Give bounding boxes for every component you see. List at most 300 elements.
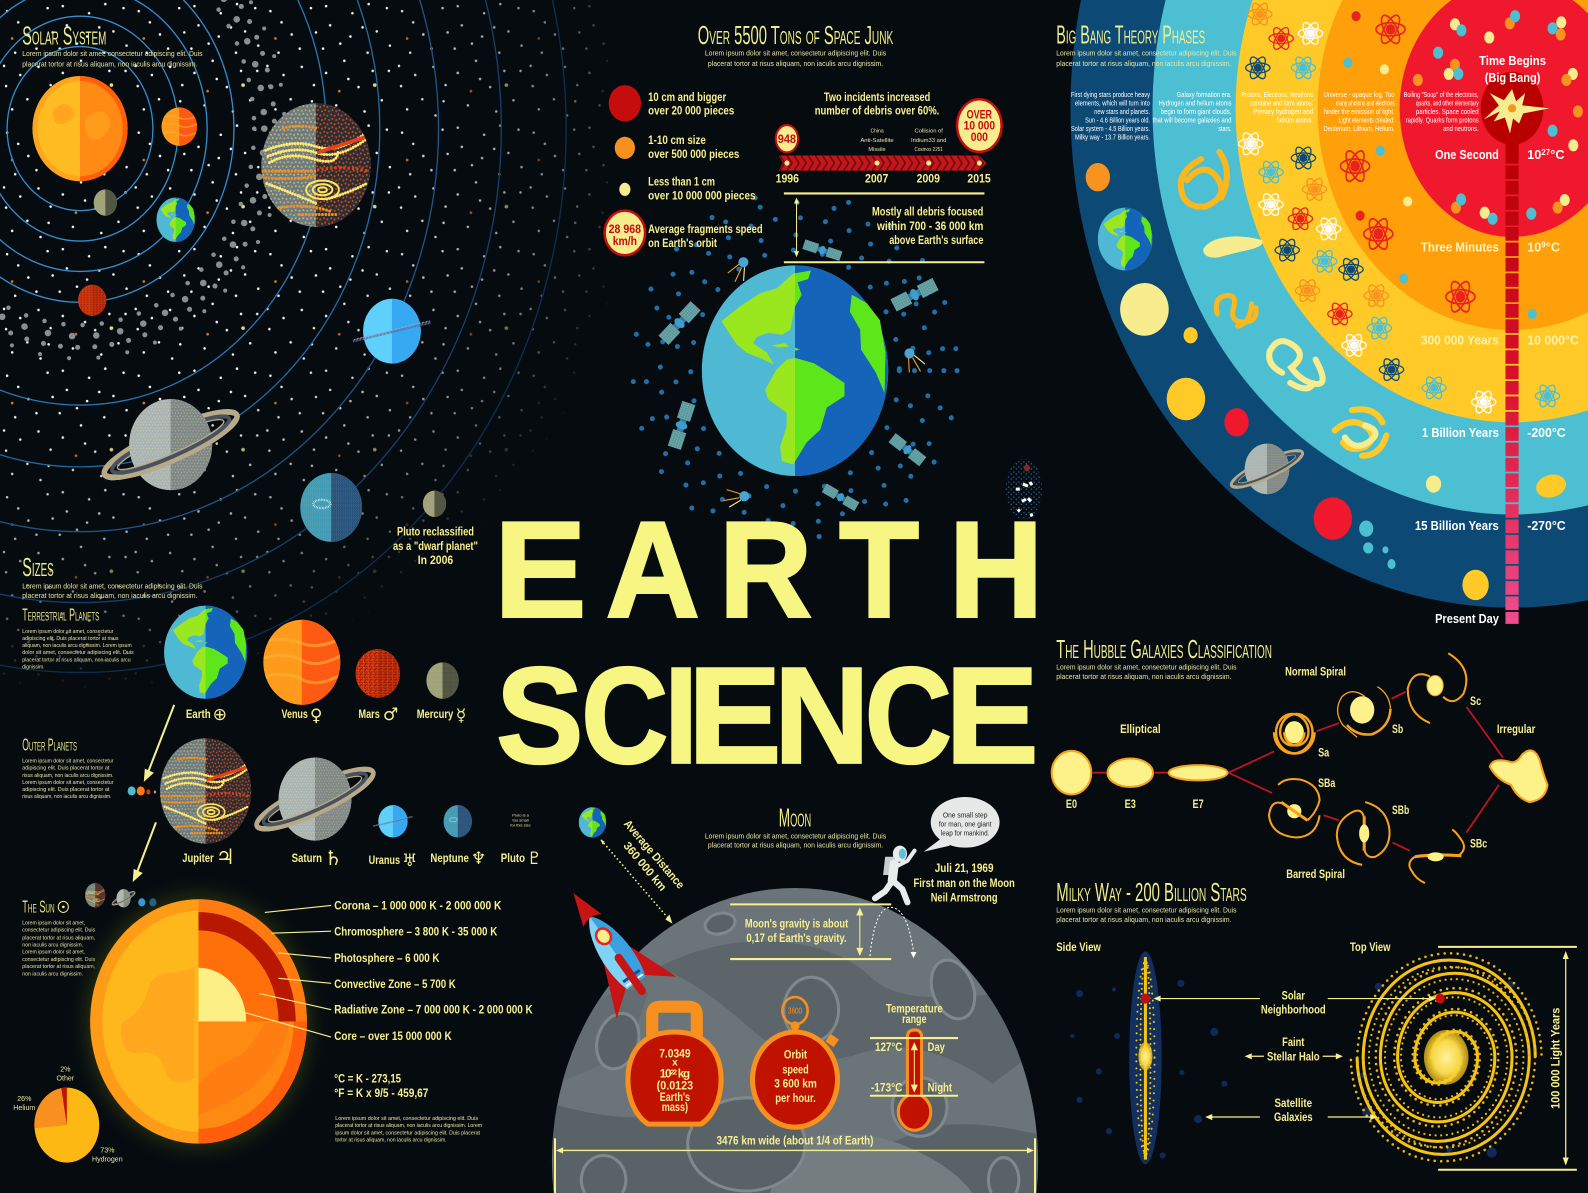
milky way labels and arrows: Faint bbox=[1282, 1036, 1305, 1049]
pie chart: sun composition: Other bbox=[56, 1075, 75, 1083]
phase descriptions: combine and form atoms. bbox=[1250, 100, 1313, 107]
phase descriptions: hinder the emission of light. bbox=[1324, 109, 1395, 116]
planet: mercury bbox=[94, 189, 117, 216]
hubble labels: Barred Spiral bbox=[1286, 868, 1345, 881]
milky way labels and arrows: Satellite bbox=[1275, 1097, 1312, 1110]
concentric phase rings bbox=[1070, 0, 1588, 608]
phase labels: 27 bbox=[1541, 148, 1551, 157]
legend: debris sizes: Less than 1 cm bbox=[648, 175, 715, 188]
barred galaxy: SBc bbox=[1409, 829, 1464, 883]
hubble labels: Sa bbox=[1318, 747, 1330, 760]
phase descriptions: Hydrogen and helium atoms bbox=[1159, 100, 1232, 107]
sizes text: Lorem ipsum dolor sit amet, consectetur adipiscing elit. Duis bbox=[22, 581, 203, 590]
phase descriptions: elements, which will turn into bbox=[1075, 100, 1150, 107]
debris altitude callout: Mostly all debris focused bbox=[872, 206, 983, 219]
thermometer: temperature range: Day bbox=[928, 1041, 945, 1054]
moon text: placerat tortor at risus aliquam, non iaculis arcu dignissim. bbox=[708, 841, 883, 850]
outer labels bbox=[182, 845, 542, 871]
terrestrial text: Lorem ipsum dolor sit amet, consectetur bbox=[22, 629, 114, 635]
planet: earth bbox=[164, 606, 247, 699]
outer text: adipiscing elit. Duis placerat tortor at bbox=[22, 787, 110, 793]
timeline: Cosmos 2251 bbox=[915, 147, 943, 153]
first man note bbox=[914, 862, 1015, 904]
pluto microtext: for this size bbox=[510, 822, 532, 827]
debris altitude callout: above Earth's surface bbox=[889, 234, 984, 247]
timeline: 948 bbox=[778, 133, 797, 146]
phase labels: 10 bbox=[1527, 241, 1541, 255]
planet: neptune bbox=[300, 473, 362, 542]
phase descriptions: helium atoms. bbox=[1277, 118, 1313, 125]
title: earth science: E bbox=[688, 639, 781, 792]
pie chart: sun composition: 73% bbox=[100, 1146, 115, 1154]
satellite bbox=[888, 433, 926, 466]
phase labels: 9 bbox=[1541, 241, 1546, 250]
heading: space junk: Over 5500 Tons of Space Junk bbox=[698, 20, 893, 50]
sun text: consectetur adipiscing elit. Duis bbox=[22, 928, 95, 934]
planet: earth bbox=[156, 197, 195, 242]
pie chart: sun composition: 2% bbox=[60, 1065, 71, 1073]
orbit rings bbox=[0, 0, 566, 672]
title: earth science: R bbox=[719, 493, 812, 646]
phase descriptions: Boiling "Soup" of the electrons, bbox=[1404, 92, 1479, 99]
hubble labels bbox=[1066, 665, 1536, 881]
connector lines bbox=[1093, 692, 1503, 851]
planet: jupiter bbox=[160, 738, 251, 844]
sun fine print bbox=[335, 1116, 482, 1143]
solar system text bbox=[22, 49, 203, 68]
milky way text: Lorem ipsum dolor sit amet, consectetur adipiscing elit. Duis bbox=[1056, 905, 1237, 914]
terrestrial labels: Earth bbox=[186, 708, 211, 721]
planet: venus bbox=[162, 107, 197, 146]
timeline: 2009 bbox=[917, 172, 940, 185]
timeline: 2007 bbox=[865, 172, 888, 185]
big bang text bbox=[1056, 49, 1237, 68]
phase labels: 10 bbox=[1527, 148, 1541, 162]
temperature formulas: °C = K - 273,15 bbox=[334, 1073, 401, 1086]
sun layer labels: Core – over 15 000 000 K bbox=[334, 1030, 452, 1043]
stopwatch: orbit speed: 3 600 km bbox=[774, 1078, 817, 1091]
asteroid belt bbox=[0, 0, 285, 359]
satellite bbox=[890, 278, 939, 312]
phase descriptions: Sun - 4.6 Billion years old. bbox=[1085, 118, 1150, 125]
phase descriptions: Deuterium, Lithium, Helium. bbox=[1324, 126, 1395, 133]
timeline: 10 000 bbox=[964, 120, 995, 133]
terrestrial text: placerat tortor at risus aliquam, non iaculis arcu bbox=[22, 657, 131, 663]
atoms bbox=[1239, 1, 1560, 415]
terrestrial labels: ♂ bbox=[383, 705, 398, 725]
icon: sun symbol bbox=[58, 901, 68, 912]
moon width dimension: 3476 km wide (about 1/4 of Earth) bbox=[717, 1134, 874, 1147]
debris altitude callout: within 700 - 36 000 km bbox=[876, 220, 983, 233]
spiral galaxy: Sb bbox=[1338, 687, 1391, 737]
elliptical galaxies bbox=[1052, 751, 1227, 794]
average distance label: 360 000 km bbox=[621, 840, 669, 894]
phase labels: 300 000 Years bbox=[1421, 333, 1499, 347]
milky way labels and arrows: Stellar Halo bbox=[1267, 1050, 1320, 1063]
outer labels: ♄ bbox=[324, 846, 342, 870]
terrestrial labels bbox=[186, 705, 466, 726]
mini inner planets bbox=[128, 786, 156, 796]
timeline: Missile bbox=[868, 147, 886, 153]
sun text: Lorem ipsum dolor sit amet, bbox=[22, 921, 85, 927]
moon text: Lorem ipsum dolor sit amet, consectetur adipiscing elit. Duis bbox=[705, 832, 886, 841]
planet: saturn bbox=[99, 399, 242, 490]
debris altitude callout bbox=[784, 193, 984, 262]
heading: moon: Moon bbox=[779, 802, 811, 832]
sun text: non iaculis arcu dignissim. bbox=[22, 971, 83, 977]
side view galaxy: Side View bbox=[1056, 941, 1102, 954]
planet: saturn bbox=[252, 758, 378, 841]
hubble labels: E0 bbox=[1066, 798, 1077, 811]
hubble labels: SBc bbox=[1470, 838, 1488, 851]
milky way labels and arrows: Galaxies bbox=[1274, 1111, 1313, 1124]
sun fine print: ipsum dolor sit amet, consectetur adipiscing elit. Duis placerat bbox=[335, 1130, 480, 1136]
speed badge: km/h bbox=[613, 235, 637, 248]
speed badge: on Earth's orbit bbox=[648, 237, 717, 250]
sun cross-section bbox=[90, 899, 307, 1144]
phase descriptions: particles. Space cooled bbox=[1416, 109, 1479, 116]
thermometer: temperature range: -173°C bbox=[871, 1082, 903, 1095]
stopwatch: orbit speed: per hour. bbox=[775, 1092, 816, 1105]
title: earth science: E bbox=[494, 493, 586, 646]
panel: milky way bbox=[1056, 877, 1577, 1170]
galaxy diameter dimension bbox=[1438, 947, 1577, 1170]
planet: venus bbox=[263, 620, 340, 705]
galaxies in cyan ring bbox=[1181, 152, 1569, 501]
sizes text: placerat tortor at risus aliquam, non iaculis arcu dignissim. bbox=[22, 591, 197, 600]
astronaut dissolved in space bbox=[1006, 459, 1042, 520]
terrestrial labels: ⊕ bbox=[213, 705, 227, 725]
thermometer: temperature range: Night bbox=[928, 1082, 952, 1095]
outer labels: Saturn bbox=[292, 852, 322, 865]
planet: neptune bbox=[444, 805, 472, 838]
space junk text: Lorem ipsum dolor sit amet, consectetur adipiscing elit. Duis bbox=[705, 49, 886, 58]
phase labels: 15 Billion Years bbox=[1415, 519, 1499, 533]
terrestrial labels: Venus bbox=[282, 708, 308, 721]
planet: mercury bbox=[426, 662, 459, 699]
phase descriptions: quarks, and other elementary bbox=[1416, 100, 1479, 107]
sun layer labels: Photosphere – 6 000 K bbox=[334, 952, 440, 965]
hubble labels: Elliptical bbox=[1120, 723, 1161, 736]
timeline: 1996 bbox=[776, 172, 799, 185]
small earth bbox=[579, 807, 606, 838]
barred galaxy: SBa bbox=[1269, 779, 1320, 838]
probe bbox=[726, 255, 756, 286]
satellite bbox=[802, 239, 842, 261]
sun text: Lorem ipsum dolor sit amet, bbox=[22, 949, 85, 955]
outer text: Lorem ipsum dolor sit amet, consectetur bbox=[22, 759, 114, 765]
heading: big bang: Big Bang Theory Phases bbox=[1056, 20, 1205, 50]
kettlebell: mass: kg bbox=[676, 1068, 690, 1081]
panel: moon bbox=[543, 797, 1038, 1193]
timeline: 000 bbox=[971, 131, 988, 144]
gravity callout: Moon's gravity is about bbox=[745, 918, 848, 931]
pluto note: Pluto reclassified bbox=[397, 526, 474, 539]
title: earth science: A bbox=[606, 493, 700, 646]
subheading: terrestrial planets: Terrestrial Planets bbox=[22, 604, 99, 624]
pluto microtext bbox=[510, 812, 532, 827]
legend: debris sizes: 10 cm and bigger bbox=[648, 91, 727, 104]
sun fine print: Lorem ipsum dolor sit amet, consectetur adipiscing elit. Duis bbox=[335, 1116, 478, 1122]
title: earth science bbox=[494, 493, 1043, 792]
outer text: risus aliquam, non iaculis arcu dignissim. bbox=[22, 794, 112, 800]
legend: debris sizes: 1-10 cm size bbox=[648, 134, 706, 147]
phase labels: Three Minutes bbox=[1421, 241, 1499, 255]
thermometer: temperature range: 127°C bbox=[875, 1041, 903, 1054]
phase descriptions: begin to form giant clouds, bbox=[1161, 109, 1232, 116]
speech bubble: leap for mankind. bbox=[941, 829, 989, 838]
outer labels: Pluto bbox=[501, 852, 525, 865]
timeline bbox=[776, 91, 1002, 185]
pluto note: as a "dwarf planet" bbox=[393, 540, 478, 553]
phase labels: Present Day bbox=[1435, 612, 1499, 626]
irregular galaxy bbox=[1490, 750, 1547, 802]
heading: milky way: Milky Way - 200 Billion Stars bbox=[1056, 877, 1247, 907]
legend: debris sizes: over 500 000 pieces bbox=[648, 148, 739, 161]
hubble labels: Irregular bbox=[1497, 723, 1536, 736]
probe bbox=[723, 489, 750, 509]
probe bbox=[903, 345, 926, 374]
space junk text bbox=[705, 49, 886, 68]
title: earth science: E bbox=[945, 639, 1039, 792]
milky way labels and arrows bbox=[1154, 990, 1436, 1124]
phase descriptions: Solar system - 4.5 Billion years. bbox=[1071, 126, 1150, 133]
thermometer: temperature range bbox=[870, 1003, 958, 1130]
space junk text: placerat tortor at risus aliquam, non iaculis arcu dignissim. bbox=[708, 59, 883, 68]
pluto note: In 2006 bbox=[418, 554, 454, 567]
terrestrial text: aliquam, non iaculis arcu dignissim. Lorem ipsum bbox=[22, 643, 132, 649]
terrestrial labels: Mercury bbox=[417, 708, 454, 721]
thermometer: temperature range: Temperature bbox=[886, 1003, 943, 1016]
barred galaxy: SBb bbox=[1337, 802, 1390, 865]
stopwatch: orbit speed: Orbit bbox=[784, 1048, 807, 1061]
speech bubble: for man, one giant bbox=[939, 819, 992, 828]
arrow: scale down to outer planets bbox=[144, 705, 174, 782]
speed badge: Average fragments speed bbox=[648, 223, 763, 236]
phase labels: 10 000°C bbox=[1527, 333, 1579, 347]
pie chart: sun composition: Hydrogen bbox=[92, 1156, 123, 1164]
outer text: adipiscing elit. Duis placerat tortor at bbox=[22, 766, 110, 772]
first man note: Juli 21, 1969 bbox=[935, 862, 994, 875]
timeline: 2015 bbox=[967, 172, 991, 185]
terrestrial text: dignissim. bbox=[22, 664, 45, 670]
star field bbox=[0, 0, 608, 709]
planet: mars bbox=[355, 649, 400, 698]
hubble labels: SBb bbox=[1392, 804, 1409, 817]
outer labels: ♅ bbox=[402, 851, 418, 871]
top view galaxy bbox=[1350, 941, 1542, 1161]
timeline: China bbox=[870, 129, 884, 135]
satellite bbox=[658, 301, 701, 345]
outer labels: Uranus bbox=[369, 854, 400, 867]
kettlebell: mass: x bbox=[672, 1057, 678, 1068]
title: earth science: I bbox=[664, 639, 698, 792]
big bang text: placerat tortor at risus aliquam, non iaculis arcu dignissim. bbox=[1056, 59, 1232, 68]
sun layer labels: Convective Zone – 5 700 K bbox=[334, 978, 456, 991]
temperature formulas bbox=[334, 1073, 428, 1100]
planet: uranus bbox=[353, 299, 431, 364]
sun text: placerat tortor at risus aliquam, bbox=[22, 964, 96, 970]
speech bubble bbox=[924, 797, 1000, 852]
terrestrial text: adipiscing elit. Duis placerat tortor at risus bbox=[22, 636, 119, 642]
debris dots bbox=[633, 192, 957, 549]
panel: the sun bbox=[13, 874, 533, 1169]
phase descriptions: many photons and electrons bbox=[1336, 100, 1395, 107]
gravity callout bbox=[730, 904, 917, 959]
spiral galaxy: Sa bbox=[1274, 714, 1315, 753]
heading: hubble: The Hubble Galaxies Classification bbox=[1056, 634, 1272, 664]
phase labels: °C bbox=[1546, 241, 1560, 255]
terrestrial text bbox=[22, 629, 134, 670]
first man note: Neil Armstrong bbox=[931, 891, 998, 904]
panel: space junk bbox=[605, 20, 1042, 549]
outer labels: ♇ bbox=[527, 849, 542, 869]
hubble labels: E3 bbox=[1125, 798, 1136, 811]
phase descriptions bbox=[1071, 92, 1479, 142]
pie chart: sun composition: Helium bbox=[13, 1104, 35, 1112]
phase labels: °C bbox=[1550, 148, 1565, 162]
kettlebell: mass: mass) bbox=[662, 1101, 688, 1114]
milky way labels and arrows: Neighborhood bbox=[1261, 1004, 1326, 1017]
arrow: earth-moon distance bbox=[601, 840, 672, 924]
title: earth science: H bbox=[949, 493, 1043, 646]
title: earth science: T bbox=[839, 493, 919, 646]
timeline: Collision of bbox=[915, 129, 943, 135]
temperature formulas: °F = K x 9/5 - 459,67 bbox=[334, 1087, 428, 1100]
panel: solar system bbox=[0, 0, 608, 709]
phase descriptions: and neutrons. bbox=[1443, 126, 1479, 133]
big bang explosion bbox=[1481, 72, 1550, 157]
timeline: Two incidents increased bbox=[824, 91, 930, 104]
galaxy diameter dimension: 100 000 Light Years bbox=[1550, 1008, 1563, 1109]
outer text bbox=[22, 759, 114, 800]
phase labels: Time Begins bbox=[1479, 54, 1546, 68]
first man note: First man on the Moon bbox=[914, 877, 1015, 890]
title: earth science: C bbox=[865, 639, 952, 792]
sun glow bbox=[67, 874, 330, 1169]
hubble text bbox=[1056, 662, 1237, 681]
outer labels: Jupiter bbox=[182, 852, 214, 865]
panel: hubble classification bbox=[1052, 634, 1547, 883]
speed badge bbox=[605, 211, 763, 255]
kettlebell: mass: 7.0349 bbox=[659, 1047, 691, 1060]
big bang text: Lorem ipsum dolor sit amet, consectetur adipiscing elit. Duis bbox=[1056, 49, 1237, 58]
phase labels: -270°C bbox=[1527, 519, 1566, 533]
stopwatch: orbit speed: speed bbox=[782, 1063, 809, 1076]
phase labels: -200°C bbox=[1527, 426, 1566, 440]
kettlebell: mass: (0.0123 bbox=[657, 1080, 694, 1093]
solar system text: Lorem ipsum dolor sit amet, consectetur adipiscing elit. Duis bbox=[22, 49, 203, 58]
sun layer labels bbox=[334, 899, 533, 1043]
pluto note bbox=[393, 526, 478, 567]
hubble labels: E7 bbox=[1193, 798, 1204, 811]
title: earth science: C bbox=[581, 639, 668, 792]
sun fine print: placerat tortor at risus aliquam, non iaculis arcu dignissim. Lorem bbox=[335, 1123, 482, 1129]
sun fine print: tortor at risus aliquam, non iaculis arcu dignissim. bbox=[335, 1137, 447, 1143]
title: earth science: S bbox=[496, 639, 583, 792]
pluto microtext: Pluto is a bbox=[512, 812, 530, 817]
phase descriptions: that will become galaxies and bbox=[1153, 118, 1232, 125]
timeline: Anti-Satellite bbox=[860, 138, 894, 144]
phase descriptions: Protons, Electrons, Neutrons bbox=[1241, 92, 1313, 99]
outer labels: ♃ bbox=[216, 845, 235, 870]
heading: sizes: Sizes bbox=[22, 552, 54, 582]
kettlebell: mass: 22 bbox=[670, 1069, 677, 1077]
hubble labels: Normal Spiral bbox=[1285, 665, 1346, 678]
average distance label: Average Distance bbox=[621, 818, 687, 892]
timeline: Iridium33 and bbox=[911, 138, 946, 144]
terrestrial text: dolor sit amet, consectetur adipiscing elit. Duis bbox=[22, 650, 134, 656]
phase labels: (Big Bang) bbox=[1485, 71, 1540, 85]
phase descriptions: rapidly. Quarks form protons bbox=[1406, 118, 1479, 125]
planets in navy ring bbox=[1086, 163, 1489, 600]
outer text: risus aliquam, non iaculis arcu dignissim. bbox=[22, 773, 114, 779]
legend: debris sizes: over 10 000 000 pieces bbox=[648, 190, 756, 203]
phase descriptions: Light elements created: bbox=[1339, 118, 1395, 125]
kettlebell: mass bbox=[628, 1007, 721, 1124]
planet: uranus bbox=[373, 805, 413, 838]
hubble text: Lorem ipsum dolor sit amet, consectetur adipiscing elit. Duis bbox=[1056, 662, 1237, 671]
terrestrial labels: Mars bbox=[359, 708, 380, 721]
phase labels: One Second bbox=[1435, 148, 1499, 162]
phase descriptions: First dying stars produce heavy bbox=[1071, 92, 1150, 99]
milky way labels and arrows: Solar bbox=[1282, 990, 1305, 1003]
outer labels: ♆ bbox=[471, 849, 486, 869]
sun layer labels: Chromosphere – 3 800 K - 35 000 K bbox=[334, 925, 498, 938]
sun text: placerat tortor at risus aliquam, bbox=[22, 935, 96, 941]
legend: debris sizes bbox=[609, 85, 756, 203]
moon width dimension bbox=[555, 1134, 1035, 1193]
planet: jupiter bbox=[261, 103, 371, 227]
top view galaxy: Top View bbox=[1350, 941, 1391, 954]
stopwatch: orbit speed: 3600 bbox=[788, 1007, 802, 1016]
timeline: number of debris over 60%. bbox=[815, 104, 939, 117]
mini outer planets bbox=[85, 883, 156, 907]
sun layer leader lines bbox=[246, 905, 331, 1037]
moon globe bbox=[552, 888, 1038, 1193]
terrestrial labels: ☿ bbox=[456, 706, 466, 726]
rocket bbox=[543, 872, 676, 1019]
hubble labels: SBa bbox=[1318, 777, 1336, 790]
speed badge: 28 968 bbox=[609, 223, 642, 236]
pluto microtext: too small bbox=[512, 817, 529, 822]
timeline ladder bbox=[1506, 135, 1519, 624]
phase descriptions: stars. bbox=[1218, 126, 1232, 133]
phase descriptions: Primary hydrogen and bbox=[1253, 109, 1313, 116]
outer labels: Neptune bbox=[430, 852, 469, 865]
moon text bbox=[705, 832, 886, 850]
subheading: outer planets: Outer Planets bbox=[22, 734, 77, 754]
phase descriptions: Universe - opaque fog. Too bbox=[1324, 92, 1395, 99]
planet: mars bbox=[78, 285, 106, 316]
planet: sun bbox=[32, 76, 128, 181]
outer text: Lorem ipsum dolor sit amet, consectetur bbox=[22, 780, 114, 786]
sun layer labels: Corona – 1 000 000 K - 2 000 000 K bbox=[334, 899, 502, 912]
panel: sizes bbox=[22, 552, 542, 907]
astronaut bbox=[875, 846, 915, 902]
speech bubble: One small step bbox=[943, 810, 987, 819]
heading: solar system: Solar System bbox=[22, 21, 106, 51]
phase descriptions: new stars and planets. bbox=[1094, 109, 1150, 116]
sizes text bbox=[22, 581, 203, 600]
sun layer labels: Radiative Zone – 7 000 000 K - 2 000 000 K bbox=[334, 1004, 533, 1017]
hubble text: placerat tortor at risus aliquam, non iaculis arcu dignissim. bbox=[1056, 672, 1232, 681]
thermometer: temperature range: range bbox=[902, 1013, 927, 1026]
panel: big bang bbox=[1056, 0, 1588, 626]
phase labels: 1 Billion Years bbox=[1422, 426, 1499, 440]
hubble labels: Sb bbox=[1392, 723, 1403, 736]
sun text: consectetur adipiscing elit. Duis bbox=[22, 957, 95, 963]
